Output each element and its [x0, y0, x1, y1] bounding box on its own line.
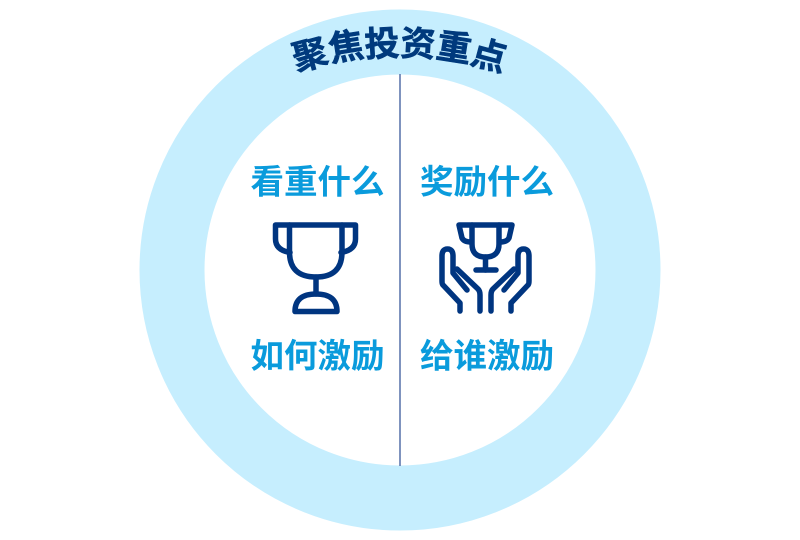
center divider line — [399, 74, 401, 466]
icon: hands holding trophy — [442, 225, 529, 311]
right heading: 奖励什么 — [420, 164, 554, 202]
ring title: 点 — [467, 33, 511, 80]
right bottom label: 给谁激励 — [420, 338, 554, 376]
ring title: 投 — [364, 24, 401, 65]
left bottom label: 如何激励 — [250, 338, 384, 376]
outer ring — [172, 42, 628, 498]
left heading: 看重什么 — [250, 164, 384, 202]
ring title — [288, 24, 511, 80]
ring title: 聚 — [288, 32, 332, 79]
icon: trophy — [276, 225, 356, 312]
ring title: 焦 — [326, 25, 366, 69]
ring title: 重 — [434, 26, 474, 70]
ring title: 资 — [399, 24, 436, 65]
